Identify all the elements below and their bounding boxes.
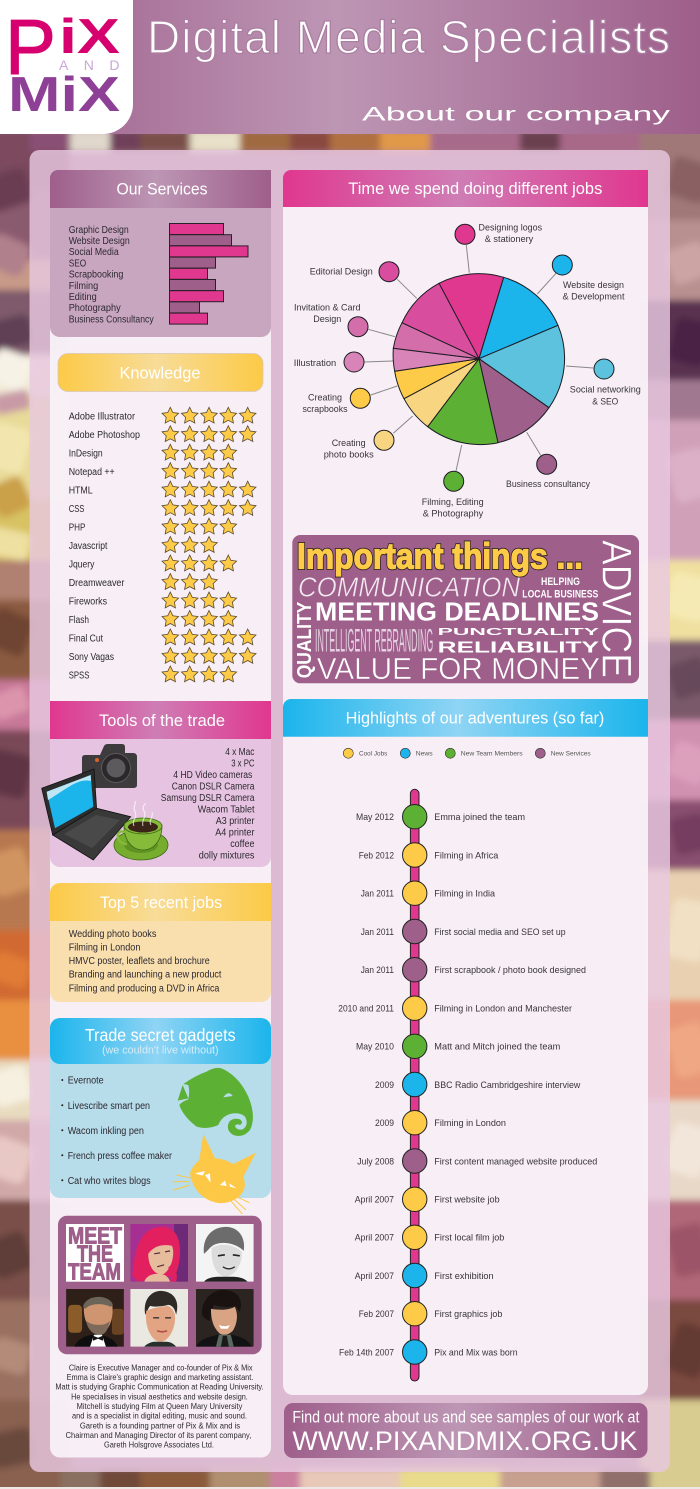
pie labels: Filming, Editing xyxy=(422,497,484,508)
team biography text: Claire is Executive Manager and co-founder of Pix & Mix xyxy=(69,1362,253,1372)
heading: Trade secret gadgets xyxy=(85,1025,236,1045)
heading: Our Services xyxy=(116,180,208,198)
timeline dates: Jan 2011 xyxy=(361,927,394,938)
skill labels: Sony Vagas xyxy=(69,652,114,663)
team biography text: Mitchell is studying Film at Queen Mary University xyxy=(77,1401,243,1411)
timeline events: First local film job xyxy=(434,1233,504,1244)
gadget list: Wacom inkling pen xyxy=(68,1126,144,1137)
timeline dates: May 2012 xyxy=(356,812,394,823)
timeline dates: May 2010 xyxy=(356,1042,394,1053)
timeline events: First social media and SEO set up xyxy=(434,927,566,938)
timeline events: Matt and Mitch joined the team xyxy=(434,1042,560,1053)
timeline spine xyxy=(410,789,419,1381)
equipment list: coffee xyxy=(230,839,255,850)
team biography text: Chairman and Managing Director of its parent company, xyxy=(66,1430,251,1440)
team biography text: He specialises in visual aesthetics and website design. xyxy=(71,1391,248,1401)
word cloud: COMMUNICATION xyxy=(298,572,521,603)
icon: coffee cup xyxy=(114,801,168,860)
pie labels: photo books xyxy=(324,450,374,460)
pie labels: Creating xyxy=(308,392,342,404)
pie labels: Business consultancy xyxy=(506,479,590,490)
timeline events: Pix and Mix was born xyxy=(434,1347,518,1358)
skill labels: Flash xyxy=(69,615,89,626)
call to action: website: Find out more about us and see samples of our work at xyxy=(292,1408,640,1426)
team biography text: Emma is Claire's graphic design and marketing assistant. xyxy=(67,1372,253,1382)
panel: knowledge xyxy=(58,354,263,682)
job list: Filming in London xyxy=(69,942,140,953)
gadget list: Evernote xyxy=(68,1076,104,1086)
heading: Tools of the trade xyxy=(99,711,225,730)
header banner xyxy=(0,0,700,134)
pie labels: & Photography xyxy=(423,508,483,520)
team biography text xyxy=(55,1362,264,1450)
timeline dates: 2009 xyxy=(375,1080,394,1091)
timeline events: First exhibition xyxy=(434,1271,494,1282)
legend: News xyxy=(416,751,433,758)
photo: Emma xyxy=(196,1224,254,1282)
timeline dates xyxy=(338,812,394,1358)
equipment list: A4 printer xyxy=(215,828,255,838)
meet the team tile: MEET xyxy=(68,1222,122,1248)
gadget list: French press coffee maker xyxy=(68,1151,173,1162)
subtitle: About our company xyxy=(362,105,671,126)
gadget list xyxy=(61,1076,173,1187)
photo: Mitchell xyxy=(196,1289,254,1347)
legend: New Services xyxy=(551,751,591,758)
timeline dates: July 2008 xyxy=(357,1156,394,1167)
photo: Matt xyxy=(130,1289,188,1347)
gadget list: Livescribe smart pen xyxy=(68,1101,150,1112)
equipment list: dolly mixtures xyxy=(199,850,254,862)
job list xyxy=(69,929,222,994)
job list: Wedding photo books xyxy=(69,929,156,940)
panel: important things word cloud xyxy=(292,535,640,686)
timeline dates: April 2007 xyxy=(355,1195,394,1206)
skill labels: Adobe Photoshop xyxy=(69,430,140,441)
icon: evernote elephant xyxy=(178,1068,253,1136)
timeline events: First scrapbook / photo book designed xyxy=(434,965,586,976)
skill labels: PHP xyxy=(69,523,86,534)
panel: meet the team xyxy=(58,1216,262,1354)
timeline events xyxy=(434,812,597,1358)
call to action: website: WWW.PIXANDMIX.ORG.UK xyxy=(292,1426,637,1456)
job list: Branding and launching a new product xyxy=(69,970,222,981)
timeline nodes xyxy=(402,804,427,1364)
bar chart: services: Photography xyxy=(69,303,121,314)
heading: Top 5 recent jobs xyxy=(100,893,222,912)
word cloud: VALUE FOR MONEY xyxy=(317,651,600,686)
timeline dates: Feb 2012 xyxy=(359,850,394,861)
panel: top 5 recent jobs xyxy=(50,883,271,1002)
skill labels: Jquery xyxy=(69,560,94,570)
word cloud: RELIABILITY xyxy=(438,639,600,656)
word cloud: PUNCTUALITY xyxy=(438,626,599,638)
word cloud xyxy=(294,540,640,686)
skill labels: Dreamweaver xyxy=(69,578,125,589)
skill labels: CSS xyxy=(69,504,85,515)
gadget list: Cat who writes blogs xyxy=(68,1176,151,1187)
skill labels xyxy=(69,412,140,681)
right column background xyxy=(283,170,648,1395)
pie labels: & SEO xyxy=(592,396,618,407)
equipment list: Canon DSLR Camera xyxy=(172,782,255,792)
photo: Gareth xyxy=(66,1289,124,1347)
panel: trade secret gadgets xyxy=(50,1018,271,1214)
photo: Claire xyxy=(130,1224,188,1282)
timeline dates: April 2007 xyxy=(355,1233,394,1244)
pie labels: scrapbooks xyxy=(302,404,348,415)
pie labels: Creating xyxy=(332,438,366,449)
equipment list: Samsung DSLR Camera xyxy=(161,793,255,804)
timeline events: Filming in London and Manchester xyxy=(434,1004,572,1014)
skill labels: Notepad ++ xyxy=(69,467,115,478)
equipment list: 3 x PC xyxy=(231,758,255,770)
pie labels: Editorial Design xyxy=(310,266,373,278)
skill labels: InDesign xyxy=(69,449,103,460)
word cloud: ADVICE xyxy=(593,540,640,678)
heading: Important things ... xyxy=(297,535,583,576)
logo: Pix and Mix xyxy=(0,0,133,134)
pie labels: Design xyxy=(313,314,341,325)
pie labels: & Development xyxy=(562,292,625,302)
timeline dates: Jan 2011 xyxy=(361,965,394,976)
word cloud: HELPING xyxy=(541,576,580,588)
meet the team tile: TEAM xyxy=(68,1258,121,1284)
bar chart: services xyxy=(69,224,248,325)
pie labels: Invitation & Card xyxy=(294,303,361,314)
skill labels: Adobe Illustrator xyxy=(69,412,136,423)
team biography text: Gareth is a founding partner of Pix & Mix and is xyxy=(80,1420,240,1430)
pie labels: Illustration xyxy=(294,358,336,369)
star ratings xyxy=(162,407,256,682)
timeline dates: 2010 and 2011 xyxy=(338,1004,394,1014)
equipment list: A3 printer xyxy=(216,816,255,827)
icon: cat xyxy=(173,1134,256,1214)
timeline dates: 2009 xyxy=(375,1118,394,1129)
skill labels: HTML xyxy=(69,486,93,497)
skill labels: SPSS xyxy=(69,670,90,681)
skill labels: Fireworks xyxy=(69,596,107,608)
timeline events: Emma joined the team xyxy=(434,812,525,823)
heading: Highlights of our adventures (so far) xyxy=(346,708,604,728)
pie labels: & stationery xyxy=(485,234,533,245)
logo: Pix and Mix: AND xyxy=(59,57,120,73)
logo: Pix and Mix: P xyxy=(5,3,56,91)
bar chart: services: Business Consultancy xyxy=(69,314,154,325)
legend: New Team Members xyxy=(461,751,523,758)
pie labels: Website design xyxy=(563,280,624,291)
heading: Important things ... xyxy=(297,535,583,576)
timeline events: First graphics job xyxy=(434,1309,502,1320)
timeline dates: Jan 2011 xyxy=(361,888,394,900)
meet the team tile: THE xyxy=(77,1240,113,1266)
logo: Pix and Mix: iX xyxy=(59,10,120,64)
timeline dates: April 2007 xyxy=(355,1271,394,1282)
team biography text: Matt is studying Graphic Communication at Reading University. xyxy=(55,1382,264,1392)
pie labels xyxy=(294,222,641,520)
callout markers xyxy=(344,224,614,491)
heading: Knowledge xyxy=(120,364,200,382)
icon: camera xyxy=(82,744,137,788)
skill labels: Javascript xyxy=(69,541,108,552)
timeline events: Filming in Africa xyxy=(434,850,499,861)
pie chart xyxy=(393,274,565,445)
team biography text: Gareth Holsgrove Associates Ltd. xyxy=(104,1440,214,1450)
legend xyxy=(343,748,591,758)
title: Digital Media Specialists xyxy=(147,11,670,63)
timeline dates: Feb 14th 2007 xyxy=(339,1347,394,1358)
team biography text: and is a specialist in digital editing, music and sound. xyxy=(72,1411,247,1421)
equipment list: 4 x Mac xyxy=(225,747,255,758)
equipment list: 4 HD Video cameras xyxy=(173,770,252,781)
heading: (we couldn't live without) xyxy=(102,1044,219,1056)
bar chart: services: Graphic Design xyxy=(69,225,129,236)
timeline dates: Feb 2007 xyxy=(359,1309,394,1320)
heading xyxy=(50,1018,271,1064)
timeline events: BBC Radio Cambridgeshire interview xyxy=(434,1080,580,1091)
bottom edge xyxy=(0,1487,700,1489)
equipment list: Wacom Tablet xyxy=(198,804,255,816)
panel: time spent on jobs xyxy=(283,170,648,520)
timeline events: First content managed website produced xyxy=(434,1156,597,1167)
heading: Time we spend doing different jobs xyxy=(348,179,602,198)
timeline events: Filming in London xyxy=(434,1118,506,1129)
equipment list xyxy=(161,747,255,862)
logo: Pix and Mix: MiX xyxy=(8,68,120,122)
pie labels: Social networking xyxy=(570,385,641,396)
skill labels: Final Cut xyxy=(69,633,103,644)
meet the team tile xyxy=(66,1222,124,1284)
panel: highlights timeline xyxy=(283,699,648,1381)
bar chart: services: Editing xyxy=(69,292,97,303)
bar chart: services: Website Design xyxy=(69,236,130,247)
panel: tools of the trade xyxy=(42,701,271,867)
heading xyxy=(58,354,263,392)
word cloud: QUALITY xyxy=(294,601,316,678)
legend: Cool Jobs xyxy=(359,751,388,758)
bar chart: services: Filming xyxy=(69,281,98,292)
icon: laptop xyxy=(42,769,131,860)
bar chart: services: Social Media xyxy=(69,247,119,258)
callout lines xyxy=(364,245,593,471)
call to action: website xyxy=(284,1403,648,1458)
left column background xyxy=(50,170,271,1458)
bar chart: services: SEO xyxy=(69,258,86,269)
job list: HMVC poster, leaflets and brochure xyxy=(69,956,210,967)
word cloud: LOCAL BUSINESS xyxy=(522,588,598,600)
panel: our services xyxy=(50,170,271,337)
job list: Filming and producing a DVD in Africa xyxy=(69,983,220,994)
pie labels: Designing logos xyxy=(479,222,542,233)
timeline events: First website job xyxy=(434,1195,500,1206)
word cloud: MEETING DEADLINES xyxy=(315,597,599,627)
bar chart: services: Scrapbooking xyxy=(69,270,123,281)
timeline events: Filming in India xyxy=(434,888,496,900)
